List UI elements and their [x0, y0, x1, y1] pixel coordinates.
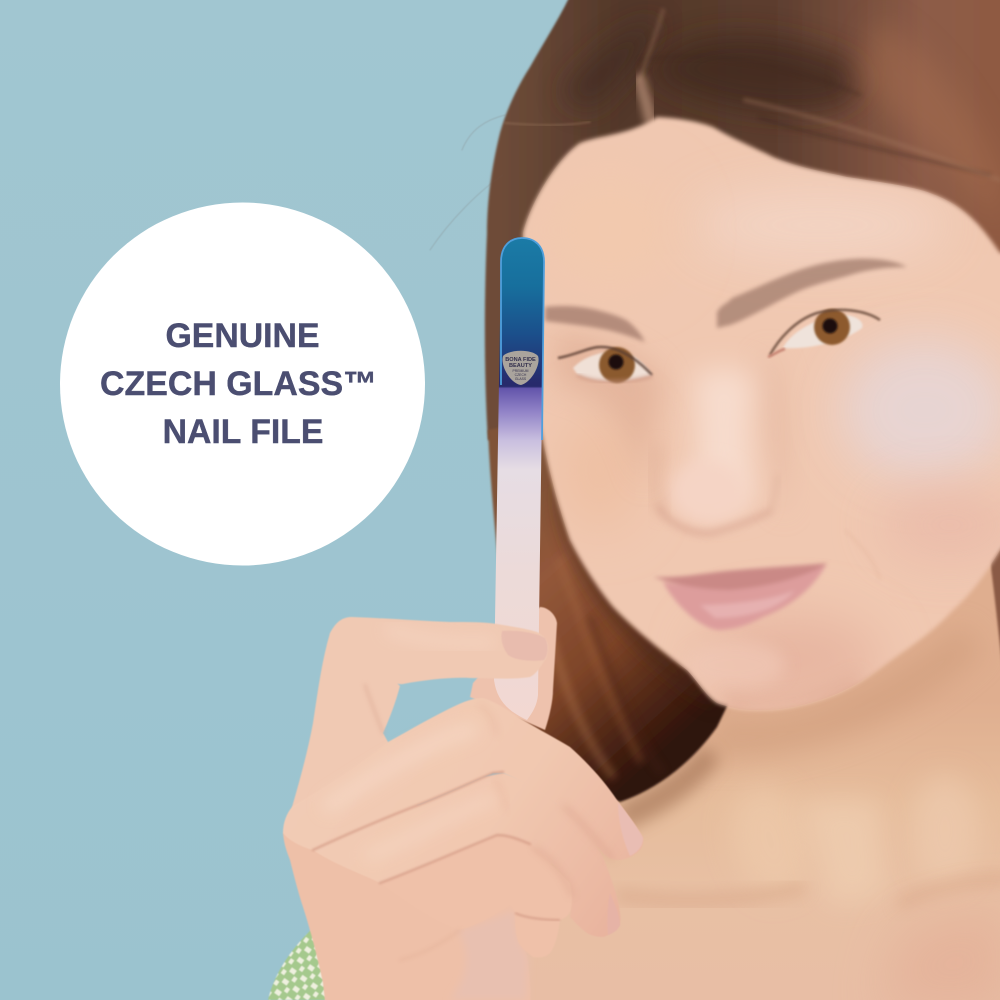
hair strands — [430, 10, 1000, 775]
logo badge: PREMIUM — [512, 369, 529, 373]
right eyebrow — [717, 259, 907, 328]
callout text: NAIL FILE — [163, 413, 323, 451]
second finger nail — [618, 802, 643, 856]
third finger nail — [607, 893, 620, 935]
logo badge: BEAUTY — [509, 363, 532, 369]
callout circle — [60, 202, 425, 566]
left eyebrow — [545, 306, 645, 342]
logo badge: BONA FIDE — [505, 357, 536, 363]
dark hair sections — [560, 20, 660, 110]
neck shading and collarbones — [615, 625, 1000, 1000]
left eye — [558, 347, 652, 383]
face tones — [540, 170, 1000, 715]
second finger — [283, 698, 643, 860]
dress fabric — [268, 928, 335, 1000]
lower finger crease — [515, 913, 560, 920]
logo badge — [502, 351, 539, 385]
logo badge: CZECH — [515, 373, 527, 377]
upper finger nail — [501, 631, 548, 661]
logo badge: GLASS — [515, 377, 527, 381]
nail file — [494, 238, 544, 720]
lips — [653, 563, 828, 630]
upper finger — [292, 617, 548, 860]
portrait of woman — [430, 0, 1000, 1000]
thumb behind file — [470, 607, 557, 730]
hand — [283, 617, 643, 1000]
face — [523, 117, 1000, 715]
palm shadow under fingers — [450, 910, 528, 1000]
file edge highlight — [501, 238, 544, 440]
right eye — [768, 309, 880, 357]
right side hair — [990, 530, 1000, 730]
palm and wrist — [283, 800, 560, 1000]
third finger — [313, 773, 620, 937]
lower left hair — [488, 420, 730, 802]
callout text: CZECH GLASS™ — [100, 365, 377, 403]
file body — [494, 238, 544, 720]
callout text: GENUINE — [166, 317, 319, 355]
neck and chest — [480, 540, 1000, 1000]
knuckle and finger shading — [313, 630, 612, 960]
hair — [430, 0, 1000, 802]
callout text — [100, 317, 377, 451]
fourth finger — [380, 835, 573, 958]
upper hair mass — [485, 0, 1000, 450]
